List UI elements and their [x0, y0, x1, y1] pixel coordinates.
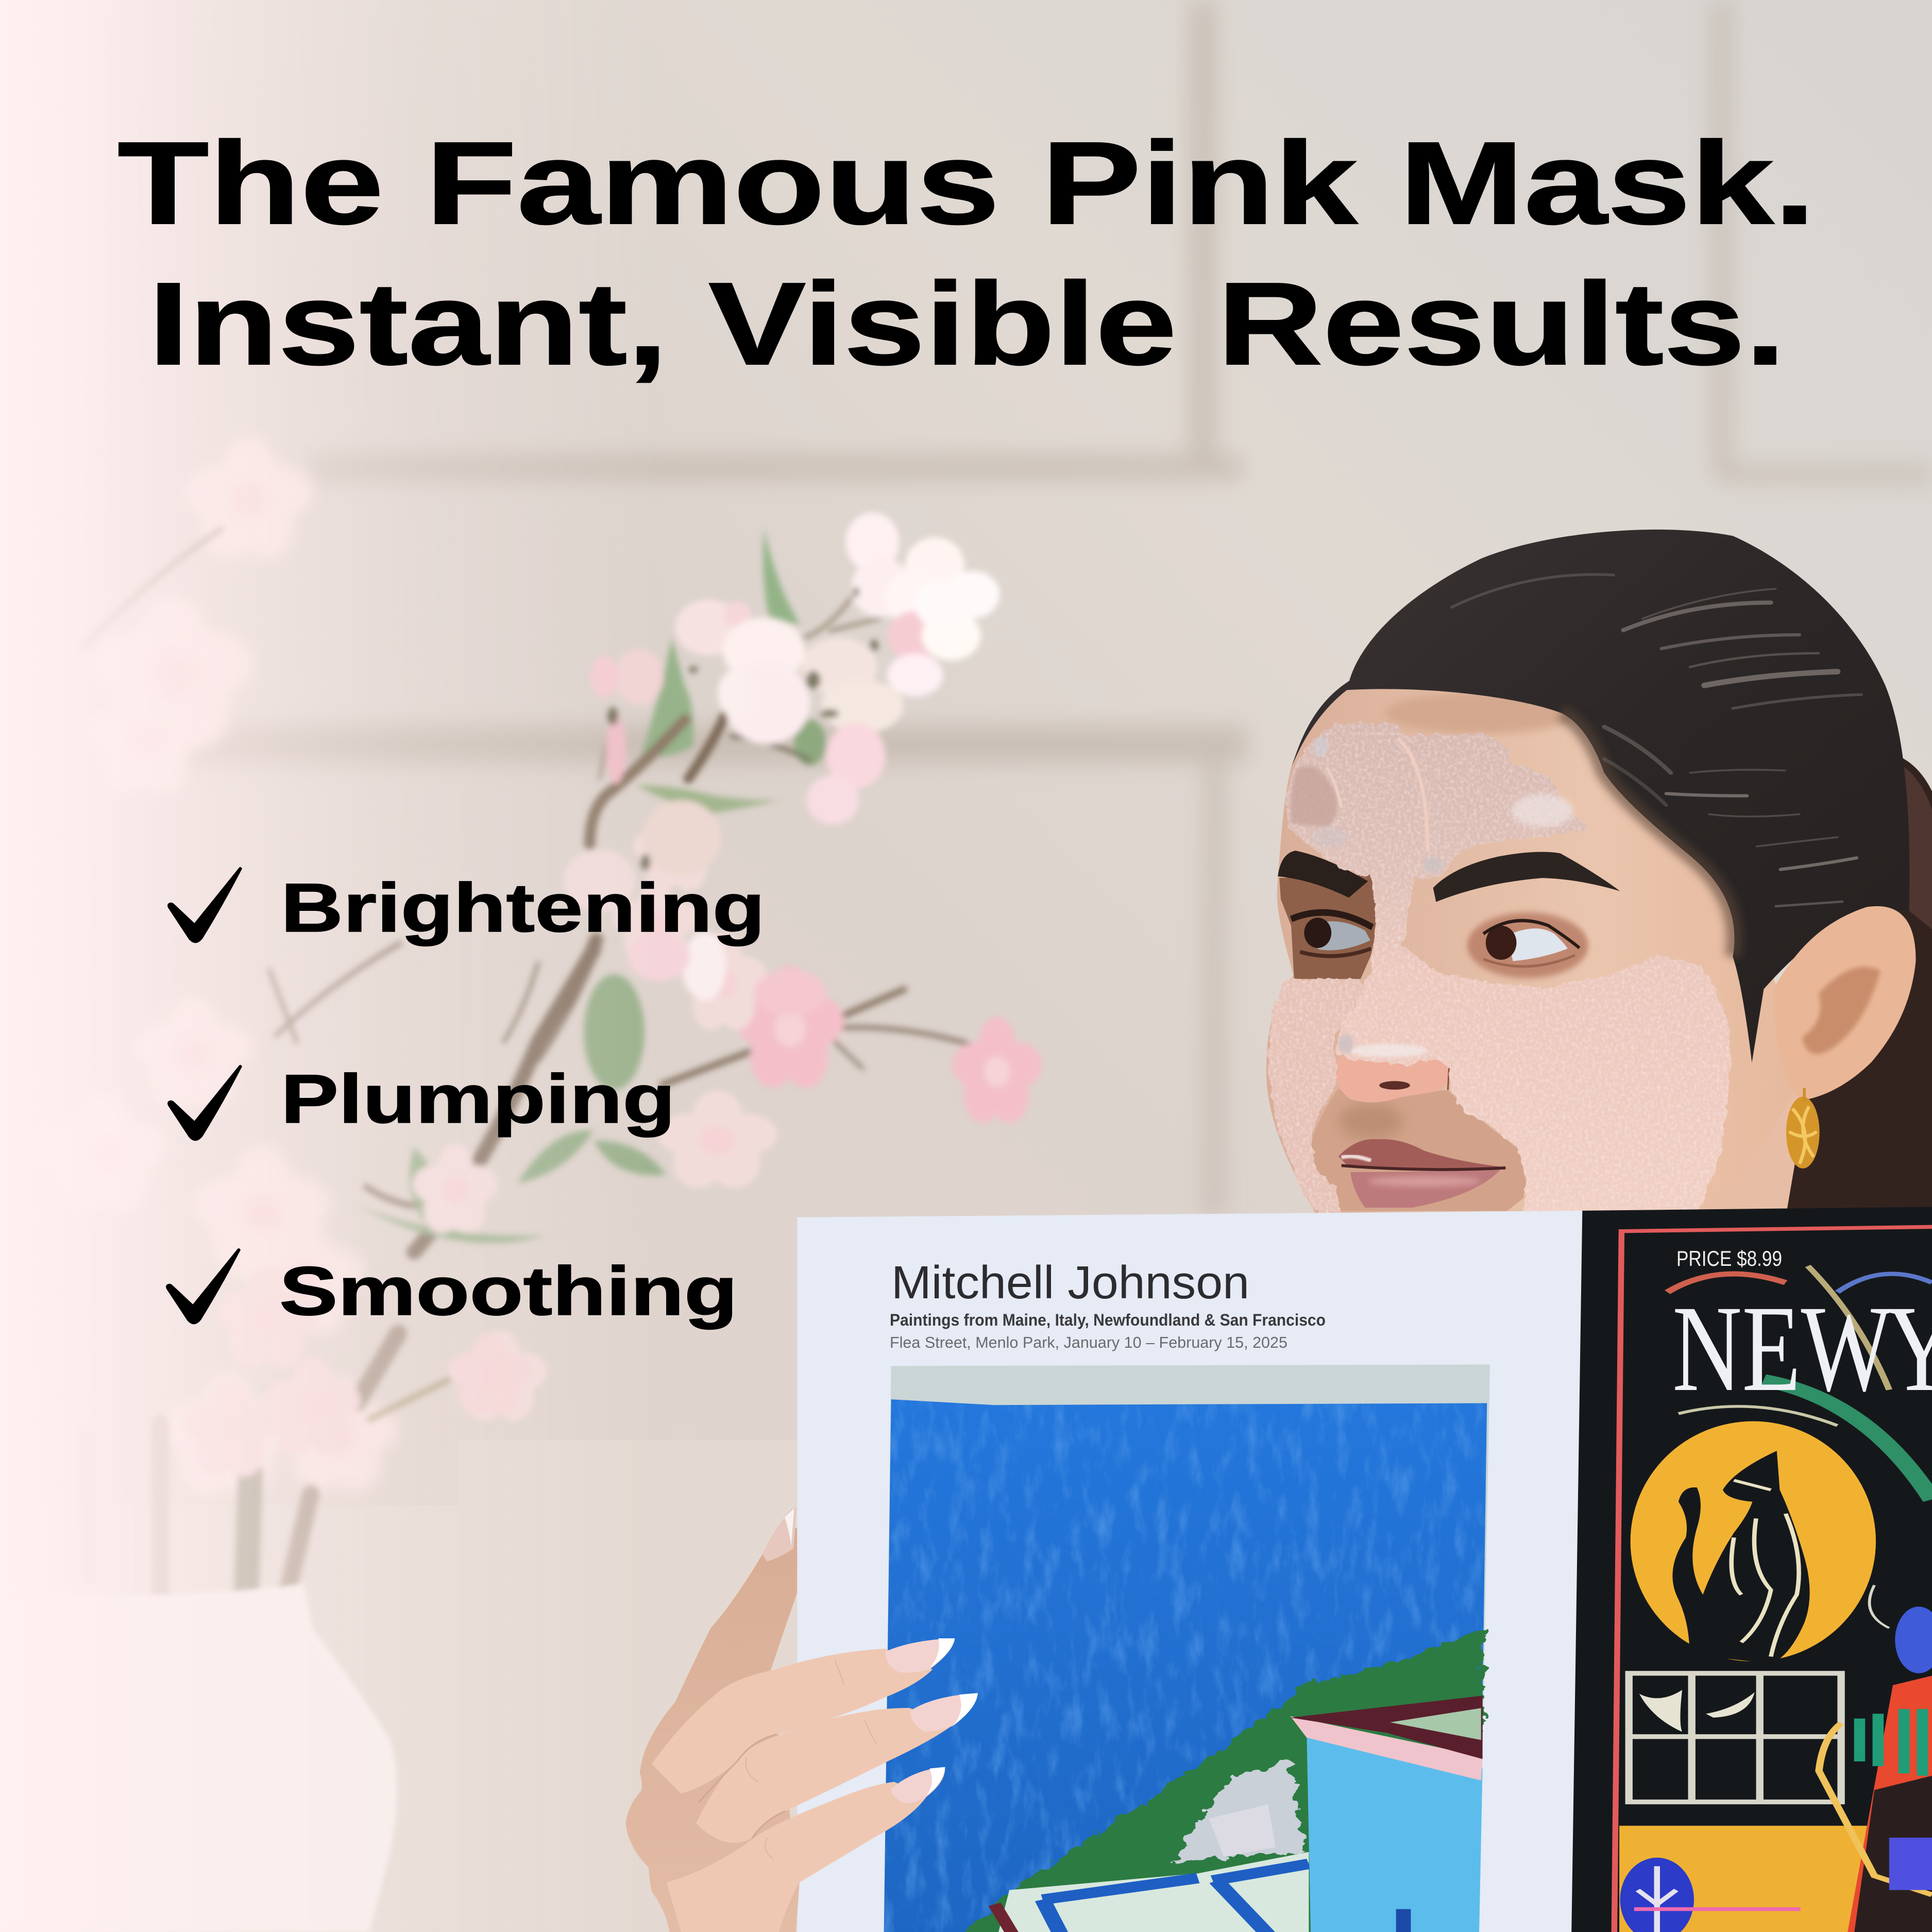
blossom branch — [83, 513, 1042, 1596]
lips — [1338, 1139, 1505, 1169]
mask texture details — [1291, 737, 1573, 1057]
item: brightening — [167, 867, 765, 946]
back of hand and thumb — [625, 1528, 800, 1932]
neck — [1662, 1058, 1809, 1214]
lower ponytail — [1803, 1082, 1932, 1226]
top blossoms — [845, 513, 999, 697]
left eyebrow — [1278, 851, 1368, 897]
hand holding magazine — [625, 1507, 978, 1932]
cover price: PRICE $8.99 — [1676, 1246, 1782, 1270]
yellow moon with cat — [1631, 1421, 1876, 1664]
check icon — [167, 867, 242, 943]
left eye socket — [1279, 875, 1378, 979]
faded left blossoms — [39, 437, 398, 1496]
fingers — [652, 1649, 956, 1932]
check icon — [167, 1065, 242, 1141]
magazine page subheading: Paintings from Maine, Italy, Newfoundland & San Francisco — [890, 1311, 1326, 1329]
thumb nail — [762, 1507, 796, 1562]
woman wearing pink mask — [1266, 530, 1932, 1226]
title line 1: The Famous Pink Mask. — [117, 118, 1816, 249]
window with birds — [1629, 1673, 1841, 1802]
figure on cover — [1634, 1585, 1932, 1932]
face features and mask — [1267, 723, 1731, 1213]
center blossoms — [675, 600, 904, 825]
leaves — [359, 974, 666, 1243]
foreground terrace — [994, 1852, 1309, 1932]
label: Brightening — [281, 870, 765, 946]
open magazine — [797, 1207, 1932, 1932]
label: Smoothing — [279, 1253, 738, 1330]
lower stems toward vase — [85, 940, 596, 1596]
upper stems — [567, 591, 882, 1005]
benefits checklist — [166, 867, 765, 1330]
check icon — [166, 1248, 241, 1324]
hair highlights — [1452, 574, 1861, 906]
soft hairline — [1562, 713, 1735, 957]
ear — [1773, 906, 1916, 1100]
lower blossoms on stems — [182, 1266, 531, 1476]
item: smoothing — [166, 1248, 738, 1330]
hair — [1292, 530, 1909, 1063]
yellow lower block — [1619, 1826, 1867, 1932]
pink blossoms — [737, 965, 1042, 1123]
magazine cover — [1571, 1207, 1932, 1932]
plant swoosh — [1764, 1380, 1932, 1499]
upper leaves — [636, 529, 826, 813]
title line 2: Instant, Visible Results. — [148, 259, 1786, 389]
label: Plumping — [281, 1061, 675, 1138]
dark calyxes — [607, 587, 878, 871]
pale pink buds — [564, 649, 826, 1015]
lower branch and blossoms — [83, 530, 1042, 1420]
earring — [1786, 1088, 1820, 1168]
magazine page details: Flea Street, Menlo Park, January 10 – February 15, 2025 — [890, 1333, 1287, 1351]
painting — [884, 1365, 1490, 1932]
red cover border — [1614, 1227, 1932, 1932]
head skin — [1266, 653, 1804, 1214]
upper blossom cluster — [564, 513, 999, 1015]
right eye — [1467, 912, 1588, 978]
left pink gradient veil — [0, 0, 670, 1932]
magazine page heading: Mitchell Johnson — [891, 1257, 1249, 1309]
title — [117, 118, 1816, 389]
pale blossoms — [413, 809, 777, 1420]
pink clay mask — [1267, 723, 1731, 1213]
nose — [1335, 1050, 1452, 1103]
ponytail — [1781, 754, 1932, 1214]
left magazine page — [797, 1211, 1582, 1932]
right eyebrow — [1433, 852, 1620, 902]
white vase — [0, 1584, 397, 1932]
item: plumping — [167, 1061, 675, 1141]
head, hair and ear — [1266, 530, 1932, 1214]
blue leaf oval — [1620, 1858, 1694, 1932]
building — [1307, 1728, 1483, 1932]
mouth area — [1310, 1088, 1526, 1211]
branches — [83, 530, 973, 1252]
green hillside — [950, 1628, 1484, 1932]
fingernails — [885, 1638, 978, 1803]
forehead shade — [1385, 692, 1575, 734]
hand creases — [699, 1660, 876, 1859]
